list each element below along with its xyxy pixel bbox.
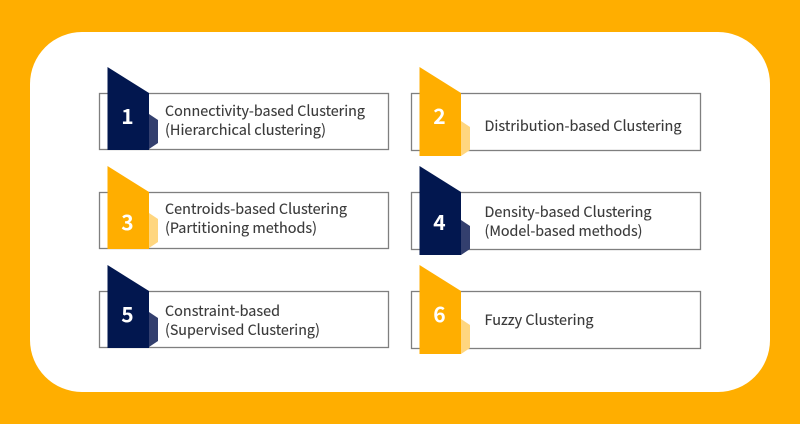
item 1: connectivity-based clustering: (Hierarchical clustering) [165, 119, 326, 140]
item 2: distribution-based clustering [412, 67, 700, 156]
item 1: connectivity-based clustering: 1 [121, 101, 134, 131]
item 5: constraint-based [100, 265, 388, 348]
item 4: density-based clustering: 4 [433, 207, 446, 237]
item 5: constraint-based: Constraint-based [165, 300, 280, 321]
item 1: connectivity-based clustering [100, 67, 388, 150]
item 5: constraint-based: 5 [121, 299, 134, 329]
item 6: fuzzy clustering: Fuzzy Clustering [484, 309, 594, 330]
item 3: centroids-based clustering: Centroids-based Clustering [165, 198, 347, 219]
item 3: centroids-based clustering: 3 [121, 207, 134, 237]
item 4: density-based clustering [412, 166, 700, 255]
item 5: constraint-based: (Supervised Clustering) [165, 319, 320, 340]
item 2: distribution-based clustering: 2 [433, 101, 446, 131]
item 3: centroids-based clustering: (Partitioning methods) [165, 217, 317, 238]
item 2: distribution-based clustering: Distribution-based Clustering [484, 115, 682, 136]
item 3: centroids-based clustering [100, 166, 388, 249]
item 6: fuzzy clustering: 6 [433, 299, 446, 329]
item 4: density-based clustering: Density-based Clustering [484, 201, 652, 222]
item 1: connectivity-based clustering: Connectivity-based Clustering [165, 100, 365, 121]
item 6: fuzzy clustering [412, 265, 700, 354]
white panel [30, 32, 770, 392]
item 4: density-based clustering: (Model-based methods) [484, 220, 642, 241]
